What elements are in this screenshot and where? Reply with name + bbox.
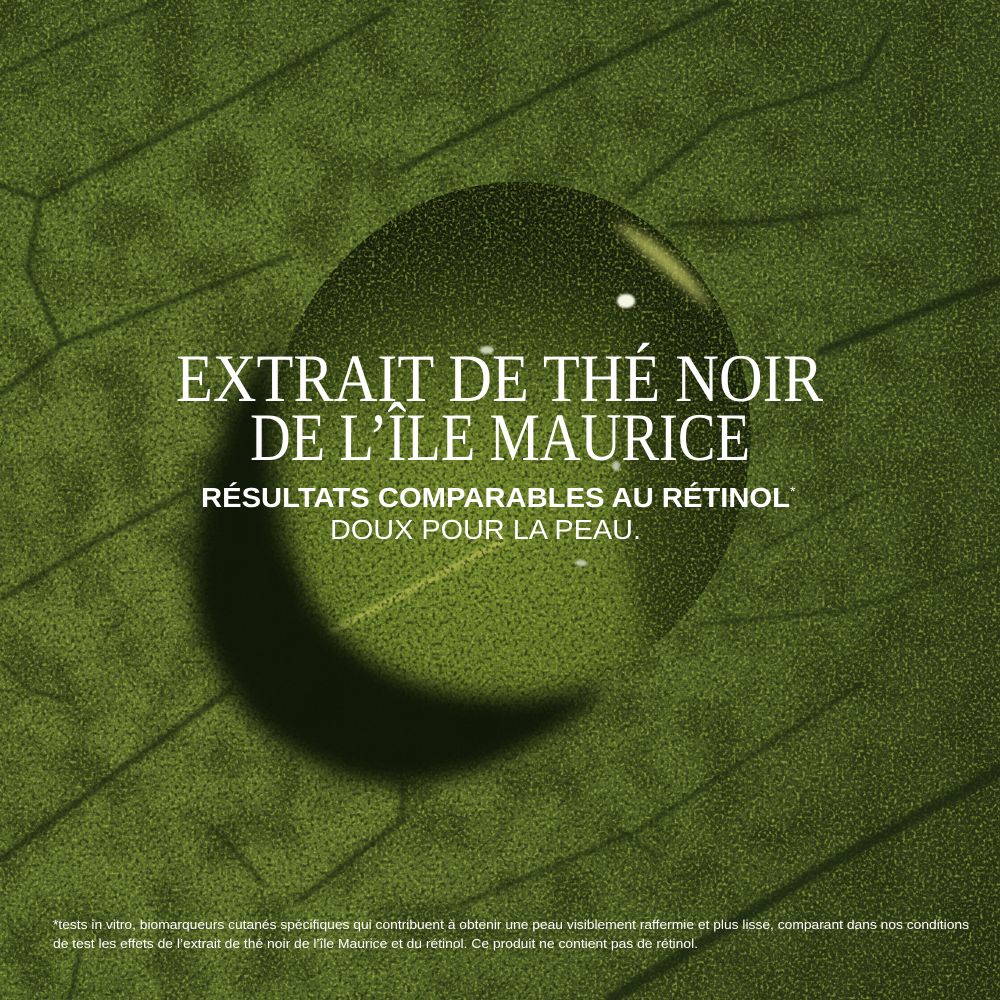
footnote: *tests in vitro, biomarqueurs cutanés spécifiques qui contribuent à obtenir une peau visiblement raffermie et plus lisse, comparant dans nos conditions: [53, 917, 970, 932]
title: DE L’ÎLE MAURICE: [250, 399, 750, 475]
subtitle: *: [790, 483, 796, 499]
subtitle: RÉSULTATS COMPARABLES AU RÉTINOL: [201, 482, 790, 513]
subtitle: [201, 482, 796, 545]
droplet highlights: [480, 222, 712, 566]
water droplet: [250, 170, 770, 705]
subtitle: DOUX POUR LA PEAU.: [330, 514, 641, 545]
footnote: [53, 917, 970, 951]
title: [176, 340, 824, 475]
drop shadow on leaf: [190, 320, 612, 786]
footnote: de test les effets de l’extrait de thé noir de l’île Maurice et du rétinol. Ce produit ne contient pas de rétinol.: [53, 936, 698, 951]
vein seen through droplet: [330, 540, 505, 632]
title: EXTRAIT DE THÉ NOIR: [176, 340, 824, 416]
